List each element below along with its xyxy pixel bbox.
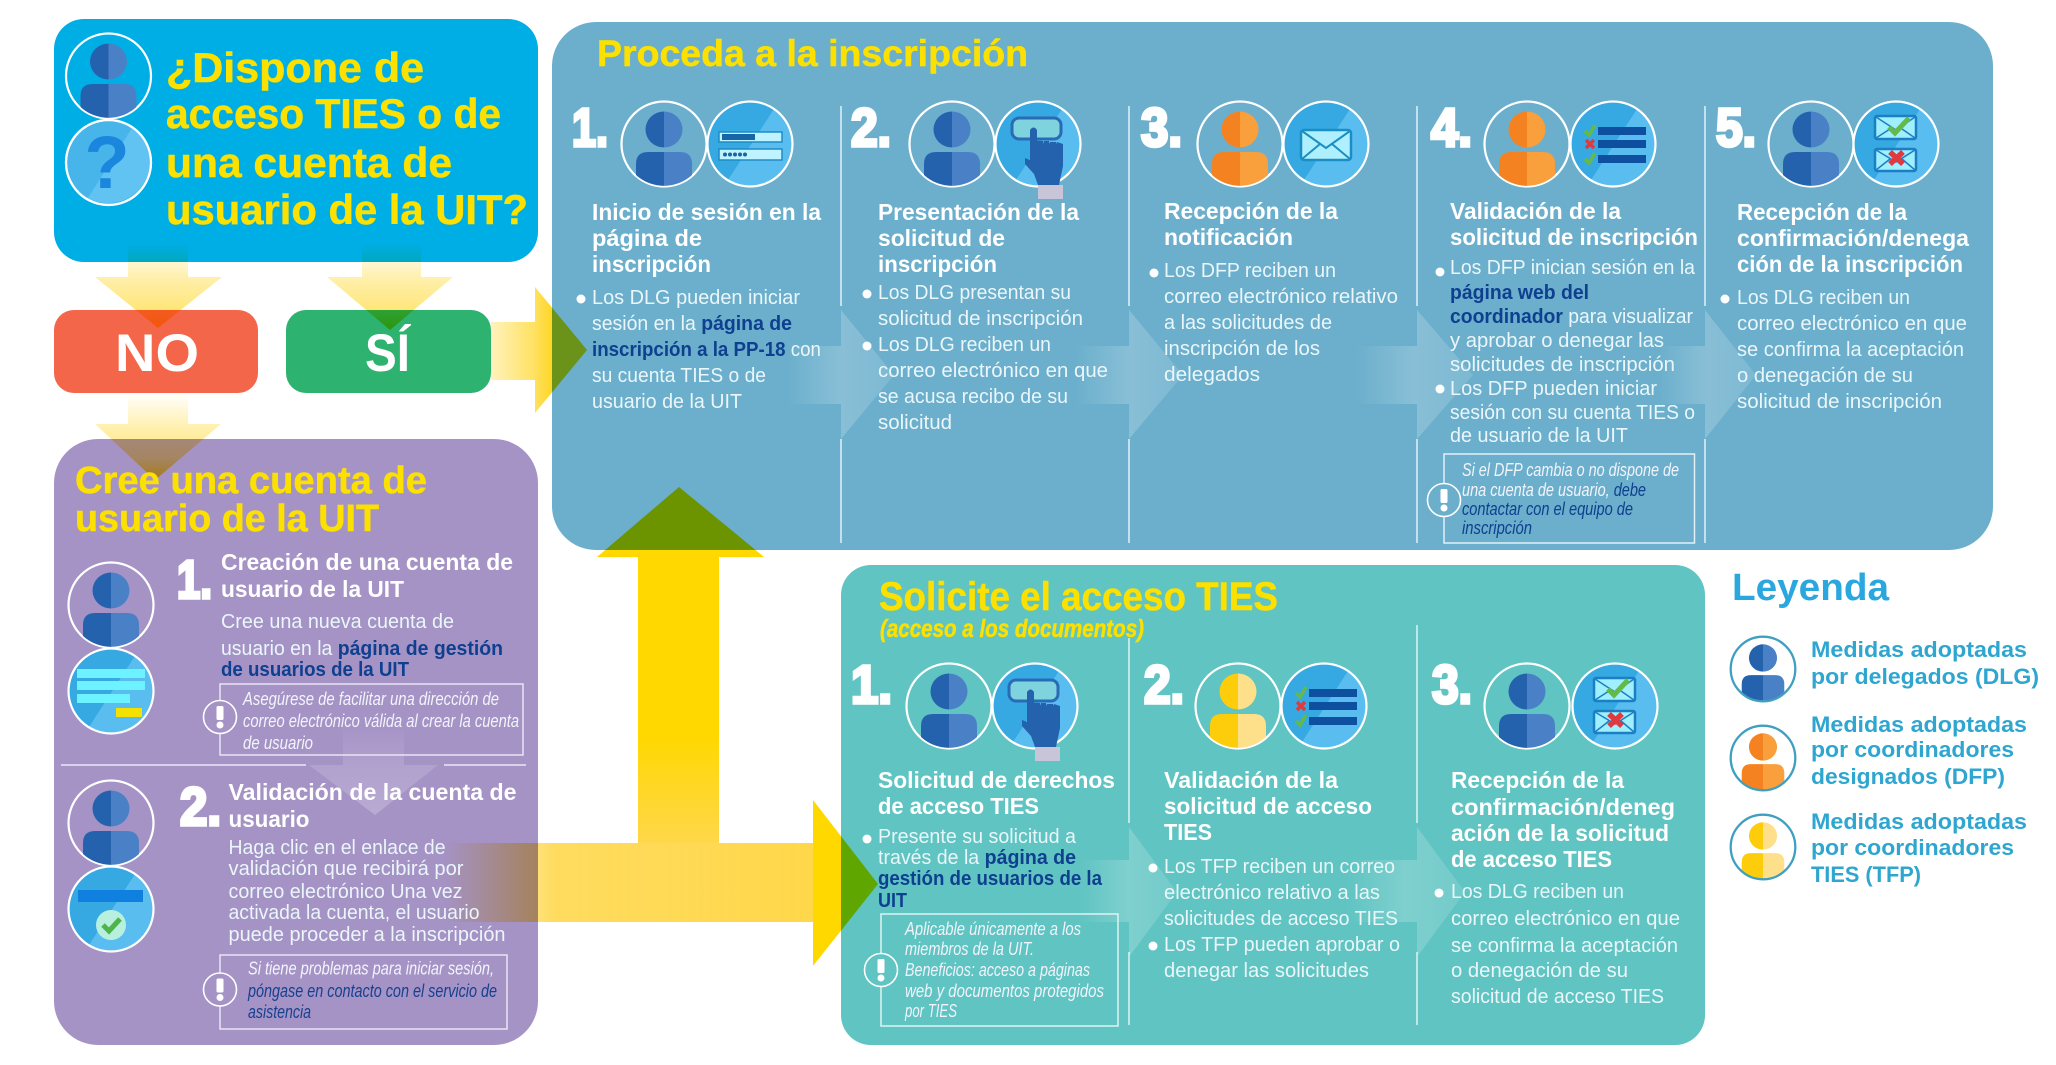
body: solicitud de inscripción bbox=[878, 308, 1083, 330]
heading bbox=[1450, 198, 1698, 250]
icon: checklist bbox=[1570, 102, 1656, 186]
arrow: account to TIES, horizontal bbox=[444, 843, 813, 922]
body: Los DLG reciben un bbox=[878, 334, 1051, 356]
heading: question: acceso TIES o de bbox=[166, 90, 501, 137]
icon: delegate bbox=[1768, 102, 1854, 186]
arrow: SÍ to registration bbox=[491, 287, 587, 413]
body: o denegación de su bbox=[1737, 365, 1913, 387]
heading: TIES access: Solicite el acceso TIES bbox=[879, 575, 1278, 619]
body: coordinador para visualizar bbox=[1450, 306, 1693, 328]
heading bbox=[592, 199, 821, 277]
heading: Validación de la bbox=[1164, 767, 1338, 793]
icon: focal point bbox=[1484, 102, 1570, 186]
number: 5. bbox=[1716, 98, 1756, 158]
arrow: account to registration, vertical bbox=[597, 487, 764, 843]
body: inscripción a la PP-18 con bbox=[592, 339, 821, 361]
icon: accepted and rejected mail bbox=[1572, 664, 1658, 748]
heading: create account: Cree una cuenta de bbox=[75, 460, 427, 502]
heading: confirmación/deneg bbox=[1451, 794, 1675, 820]
number: 1. bbox=[572, 98, 608, 158]
body: electrónico relativo a las bbox=[1164, 882, 1380, 904]
step 1 text: de usuarios de la UIT bbox=[221, 659, 409, 681]
step 2: submission bbox=[851, 98, 1108, 434]
body: solicitudes de inscripción bbox=[1450, 354, 1675, 376]
body bbox=[862, 282, 1108, 434]
step 1 text: Cree una nueva cuenta de bbox=[221, 611, 454, 633]
body: través de la página de bbox=[878, 847, 1076, 869]
note: login problems: asistencia bbox=[248, 1002, 311, 1022]
icon: hand pressing button bbox=[996, 102, 1080, 199]
legend item: TIES coordinators: TIES (TFP) bbox=[1811, 862, 1921, 887]
note: DFP change bbox=[1428, 454, 1694, 543]
step 2 text: usuario bbox=[228, 806, 310, 832]
panel: create account background bbox=[54, 439, 538, 1045]
body bbox=[862, 826, 1103, 912]
icon: accepted and rejected mail bbox=[1854, 102, 1938, 186]
icon: hand pressing button bbox=[992, 664, 1078, 761]
heading: question: usuario de la UIT? bbox=[166, 186, 528, 233]
icon: question mark bbox=[66, 120, 151, 205]
legend item: delegates bbox=[1731, 637, 2039, 701]
note: valid email: de usuario bbox=[243, 733, 313, 753]
step 2 text bbox=[228, 779, 516, 946]
body: correo electrónico en que bbox=[1451, 908, 1680, 930]
heading: Validación de la bbox=[1450, 198, 1621, 224]
body bbox=[1436, 257, 1696, 447]
note: login problems: Si tiene problemas para iniciar sesión, bbox=[248, 958, 494, 978]
heading: Inicio de sesión en la bbox=[592, 199, 821, 225]
legend item: designated coordinators: Medidas adoptadas bbox=[1811, 712, 2027, 737]
body bbox=[1434, 881, 1680, 1008]
body: Los DLG reciben un bbox=[1451, 881, 1624, 903]
arrows: registration steps bbox=[787, 310, 1756, 439]
panel: question background bbox=[54, 19, 538, 262]
heading: inscripción bbox=[878, 251, 997, 277]
number: 3. bbox=[1432, 655, 1472, 715]
legend title: Leyenda bbox=[1732, 567, 1890, 609]
body: de usuario de la UIT bbox=[1450, 425, 1628, 447]
legend item: designated coordinators: por coordinadores bbox=[1811, 737, 2014, 762]
heading bbox=[878, 767, 1115, 819]
heading: solicitud de acceso bbox=[1164, 793, 1372, 819]
subheading: (acceso a los documentos) bbox=[880, 615, 1144, 643]
note: DFP change: una cuenta de usuario, debe bbox=[1462, 480, 1646, 500]
note: ITU members: Beneficios: acceso a páginas bbox=[905, 960, 1090, 980]
step 2 text: Validación de la cuenta de bbox=[228, 779, 516, 805]
step 2 text: activada la cuenta, el usuario bbox=[228, 902, 480, 924]
note: valid email: correo electrónico válida al crear la cuenta bbox=[243, 711, 519, 731]
body: Los TFP reciben un correo bbox=[1164, 856, 1395, 878]
body: se acusa recibo de su bbox=[878, 386, 1068, 408]
body: correo electrónico en que bbox=[878, 360, 1108, 382]
body: solicitud de inscripción bbox=[1737, 391, 1942, 413]
arrow: NO to create account bbox=[95, 393, 221, 480]
step 1 text: usuario de la UIT bbox=[221, 576, 404, 602]
step 4: validation bbox=[1428, 98, 1698, 543]
legend item: TIES coordinators bbox=[1731, 809, 2027, 887]
heading: solicitud de bbox=[878, 225, 1005, 251]
body bbox=[576, 287, 821, 413]
heading: TIES bbox=[1164, 819, 1212, 845]
icon: envelope bbox=[1284, 102, 1368, 186]
note: ITU members: miembros de la UIT. bbox=[905, 939, 1034, 959]
body: a las solicitudes de bbox=[1164, 312, 1332, 334]
step number 1: 1. bbox=[177, 550, 212, 610]
body: correo electrónico en que bbox=[1737, 313, 1967, 335]
body: Presente su solicitud a bbox=[878, 826, 1077, 848]
heading: confirmación/denega bbox=[1737, 225, 1969, 251]
body: se confirma la aceptación bbox=[1451, 935, 1678, 957]
body: correo electrónico relativo bbox=[1164, 286, 1398, 308]
note: login problems: póngase en contacto con el servicio de bbox=[247, 981, 497, 1001]
legend item: delegates: por delegados (DLG) bbox=[1811, 664, 2039, 689]
heading: question: ¿Dispone de bbox=[166, 44, 424, 91]
body: Los DFP reciben un bbox=[1164, 260, 1336, 282]
body: se confirma la aceptación bbox=[1737, 339, 1964, 361]
body: sesión con su cuenta TIES o bbox=[1450, 402, 1695, 424]
step 1 text: Creación de una cuenta de bbox=[221, 549, 513, 575]
body: Los DLG pueden iniciar bbox=[592, 287, 800, 309]
heading: Recepción de la bbox=[1164, 198, 1338, 224]
button: SÍ bbox=[286, 310, 491, 393]
body bbox=[1150, 260, 1398, 386]
body bbox=[1148, 856, 1400, 982]
heading: registration: Proceda a la inscripción bbox=[597, 33, 1028, 74]
panel: registration background bbox=[552, 22, 1993, 550]
panel content: create account bbox=[61, 460, 526, 1029]
step number 2: 2. bbox=[180, 777, 221, 837]
TIES step 2 bbox=[1144, 655, 1400, 982]
heading bbox=[1164, 767, 1372, 845]
heading: question bbox=[166, 44, 528, 233]
note: valid email: Asegúrese de facilitar una dirección de bbox=[242, 689, 499, 709]
heading: create account bbox=[75, 460, 427, 540]
note: DFP change: contactar con el equipo de bbox=[1462, 499, 1633, 519]
icons: account step 1 bbox=[68, 562, 154, 734]
heading: de acceso TIES bbox=[878, 793, 1039, 819]
legend bbox=[1731, 567, 2039, 887]
heading: Solicitud de derechos bbox=[878, 767, 1115, 793]
body: inscripción de los bbox=[1164, 338, 1320, 360]
icon: focal point bbox=[1198, 102, 1282, 186]
body: solicitud bbox=[878, 412, 952, 434]
body: y aprobar o denegar las bbox=[1450, 330, 1664, 352]
note: login problems bbox=[204, 955, 507, 1029]
icon: checklist bbox=[1282, 664, 1366, 748]
heading: Recepción de la bbox=[1451, 767, 1624, 793]
body: gestión de usuarios de la bbox=[878, 868, 1103, 890]
body: Los TFP pueden aprobar o bbox=[1164, 934, 1400, 956]
heading: question: una cuenta de bbox=[166, 139, 452, 186]
legend item: designated coordinators: designados (DFP) bbox=[1811, 764, 2005, 789]
icon: delegate bbox=[1484, 664, 1570, 748]
heading: página de bbox=[592, 225, 702, 251]
note: DFP change: inscripción bbox=[1462, 518, 1532, 538]
number: 2. bbox=[1144, 655, 1184, 715]
step 3: notification bbox=[1141, 98, 1398, 386]
heading: de acceso TIES bbox=[1451, 846, 1612, 872]
legend item: TIES coordinators: por coordinadores bbox=[1811, 835, 2014, 860]
icon: delegate bbox=[622, 102, 706, 186]
number: 2. bbox=[851, 98, 891, 158]
icon: delegate bbox=[906, 664, 992, 748]
heading: solicitud de inscripción bbox=[1450, 224, 1698, 250]
icon: login form bbox=[708, 102, 792, 186]
body: delegados bbox=[1164, 364, 1260, 386]
heading: inscripción bbox=[592, 251, 711, 277]
step 2 text: validación que recibirá por bbox=[228, 858, 464, 880]
panel content: question bbox=[66, 34, 528, 233]
heading: ación de la solicitud bbox=[1451, 820, 1669, 846]
heading: create account: usuario de la UIT bbox=[75, 498, 379, 540]
legend item: designated coordinators bbox=[1731, 712, 2027, 790]
step 2 text: correo electrónico Una vez bbox=[228, 881, 462, 903]
number: 4. bbox=[1431, 98, 1472, 158]
note: ITU members: web y documentos protegidos bbox=[905, 981, 1104, 1001]
body bbox=[1720, 287, 1967, 413]
panel content: registration bbox=[572, 33, 1969, 543]
body: Los DFP pueden iniciar bbox=[1450, 378, 1657, 400]
body: denegar las solicitudes bbox=[1164, 960, 1369, 982]
heading bbox=[1164, 198, 1338, 250]
note: valid email bbox=[204, 684, 523, 755]
heading: ción de la inscripción bbox=[1737, 251, 1963, 277]
step 1: login bbox=[572, 98, 821, 413]
icon: TIES focal point bbox=[1196, 664, 1280, 748]
panel: TIES access background bbox=[841, 565, 1705, 1045]
note: ITU members: Aplicable únicamente a los bbox=[904, 919, 1081, 939]
legend item: TIES coordinators: Medidas adoptadas bbox=[1811, 809, 2027, 834]
step 2 text: Haga clic en el enlace de bbox=[228, 837, 446, 859]
arrow: question to SÍ bbox=[327, 243, 453, 330]
arrow: between account steps bbox=[309, 725, 438, 815]
body: Los DFP inician sesión en la bbox=[1450, 257, 1696, 279]
arrow: question to NO bbox=[95, 243, 222, 328]
heading: Presentación de la bbox=[878, 199, 1079, 225]
step 1 text: usuario en la página de gestión bbox=[221, 638, 503, 660]
heading: notificación bbox=[1164, 224, 1293, 250]
body: Los DLG reciben un bbox=[1737, 287, 1910, 309]
step 2 text: puede proceder a la inscripción bbox=[228, 924, 506, 946]
heading bbox=[1737, 199, 1969, 277]
heading: Recepción de la bbox=[1737, 199, 1907, 225]
note: ITU members: por TIES bbox=[904, 1001, 957, 1021]
label: SÍ: SÍ bbox=[365, 323, 411, 383]
number: 1. bbox=[851, 655, 892, 715]
body: Los DLG presentan su bbox=[878, 282, 1071, 304]
body: solicitudes de acceso TIES bbox=[1164, 908, 1398, 930]
legend item: delegates: Medidas adoptadas bbox=[1811, 637, 2027, 662]
arrow head: account to TIES bbox=[813, 800, 878, 966]
body: sesión en la página de bbox=[592, 313, 792, 335]
note: ITU members bbox=[864, 914, 1118, 1026]
heading bbox=[878, 199, 1079, 277]
icons: account step 2 bbox=[68, 780, 154, 952]
number: 3. bbox=[1141, 98, 1182, 158]
body: su cuenta TIES o de bbox=[592, 365, 766, 387]
TIES step 3 bbox=[1432, 655, 1680, 1008]
body: usuario de la UIT bbox=[592, 391, 742, 413]
button: NO bbox=[54, 310, 258, 393]
body: o denegación de su bbox=[1451, 960, 1628, 982]
body: solicitud de acceso TIES bbox=[1451, 986, 1664, 1008]
step 1 text bbox=[221, 549, 513, 681]
heading bbox=[1451, 767, 1675, 872]
TIES step 1 bbox=[851, 655, 1118, 1026]
icon: question mark: ? bbox=[84, 121, 130, 204]
arrows: TIES steps bbox=[1079, 827, 1465, 957]
body: página web del bbox=[1450, 282, 1589, 304]
label: NO: NO bbox=[115, 324, 199, 383]
icon: person bbox=[66, 34, 151, 118]
note: DFP change: Si el DFP cambia o no dispone de bbox=[1462, 460, 1679, 480]
step 5: confirmation bbox=[1716, 98, 1969, 413]
panel content: TIES access bbox=[851, 575, 1680, 1026]
body: UIT bbox=[878, 890, 907, 912]
icon: delegate bbox=[910, 102, 994, 186]
